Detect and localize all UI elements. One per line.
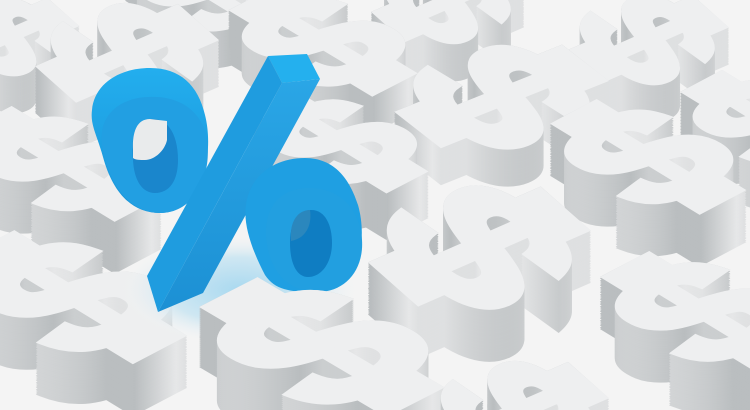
blue floor reflection xyxy=(120,235,360,345)
percent sign xyxy=(92,54,362,312)
dollar sign: main centre right: $ xyxy=(326,155,635,338)
percent: upper zero xyxy=(92,68,208,213)
dollar sign: main centre right: $ xyxy=(326,155,635,338)
percent: lower zero xyxy=(245,158,362,292)
dollar sign: upper centre right: $ xyxy=(354,18,649,174)
dollar sign: behind percent: $ xyxy=(217,70,463,212)
dollar sign: upper centre right: $ xyxy=(354,18,649,174)
percent: slash xyxy=(147,54,320,312)
dollar sign: behind percent: $ xyxy=(217,70,463,212)
